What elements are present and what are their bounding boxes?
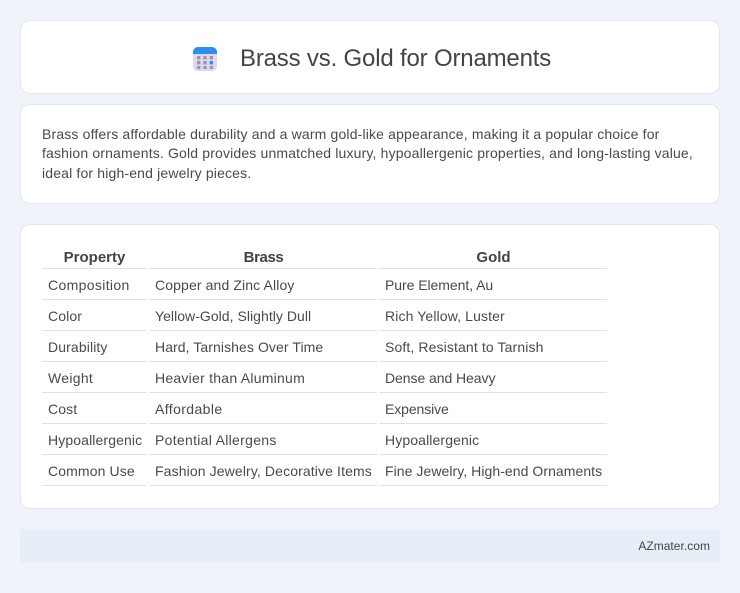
gold color: Rich Yellow, Luster [385,308,505,324]
row: color: Color [48,308,82,324]
summary text: Brass offers affordable durability and a warm gold-like appearance, making it a popular choice for [42,126,660,142]
summary text: fashion ornaments. Gold provides unmatched luxury, hypoallergenic properties, and long-lasting value, [42,145,693,161]
footer bar [20,529,720,563]
row: cost: Cost [48,401,77,417]
gold durability: Soft, Resistant to Tarnish [385,339,544,355]
row: common use: Common Use [48,463,135,479]
title: Brass vs. Gold for Ornaments [240,45,551,72]
row: composition: Composition [48,277,130,293]
row: durability: Durability [48,339,108,355]
row: hypoallergenic: Hypoallergenic [48,432,142,448]
brass color: Yellow-Gold, Slightly Dull [155,308,311,324]
gold hypoallergenic: Hypoallergenic [385,432,479,448]
table header: gold: Gold [476,249,511,266]
gold cost: Expensive [385,401,449,417]
footer credit: AZmater.com [638,539,710,553]
summary text: ideal for high-end jewelry pieces. [42,165,251,181]
table header: brass: Brass [244,249,283,266]
gold common use: Fine Jewelry, High-end Ornaments [385,463,602,479]
gold weight: Dense and Heavy [385,370,495,386]
panel: title card [20,20,720,94]
summary text [42,126,693,181]
brass durability: Hard, Tarnishes Over Time [155,339,323,355]
brass composition: Copper and Zinc Alloy [155,277,294,293]
row: weight: Weight [48,370,93,386]
brass hypoallergenic: Potential Allergens [155,432,277,448]
icon: calendar [193,47,217,71]
brass common use: Fashion Jewelry, Decorative Items [155,463,372,479]
brass cost: Affordable [155,401,223,417]
brass weight: Heavier than Aluminum [155,370,305,386]
panel: summary [20,104,720,204]
gold composition: Pure Element, Au [385,277,493,293]
table header: property: Property [64,249,125,266]
panel: comparison table [20,224,720,509]
